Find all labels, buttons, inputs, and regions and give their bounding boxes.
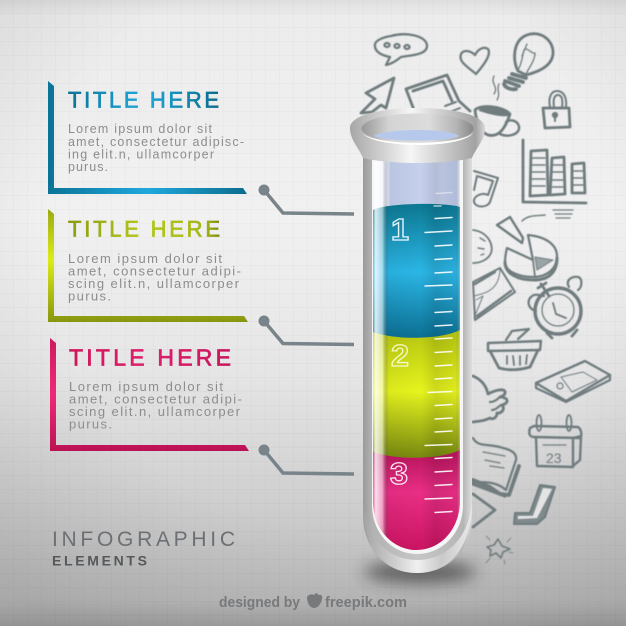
icon: calendar: 23 <box>546 450 562 466</box>
rim opening <box>362 114 474 144</box>
icon: cursor arrow <box>361 78 394 113</box>
icon: pie chart <box>497 215 557 280</box>
icon: light bulb <box>504 34 553 89</box>
text block: green description: scing elit.n, ullamcorper <box>68 276 240 291</box>
icon: calendar <box>529 415 581 467</box>
icon: text lines <box>553 210 573 218</box>
tube base highlight <box>363 500 472 573</box>
credit text: freepik: freepik.com <box>325 595 407 611</box>
glass interior <box>372 160 463 554</box>
yellow liquid <box>373 330 460 458</box>
icon: padlock <box>543 91 570 128</box>
panel: title three <box>50 338 249 451</box>
heading: blue title: TITLE HERE <box>68 88 219 112</box>
liquid surface seen through opening <box>374 130 459 140</box>
text block: blue description: purus. <box>68 160 108 174</box>
text block: pink description: Lorem ipsum dolor sit <box>69 379 223 394</box>
sketch icons <box>361 34 610 564</box>
icon: star <box>486 536 513 564</box>
credit text: designed by: designed by <box>219 595 300 611</box>
test tube <box>350 108 485 583</box>
pink liquid <box>373 450 460 555</box>
scale ticks <box>425 192 452 512</box>
bracket: green <box>48 209 248 322</box>
connector: title two to tube <box>258 316 354 344</box>
panel: title two <box>48 209 248 322</box>
icon: heart <box>460 48 489 74</box>
number 1: 1 <box>391 212 409 247</box>
heading: green title: TITLE HERE <box>68 216 220 242</box>
icon: freepik logo <box>307 593 322 608</box>
panel: title one <box>48 81 247 194</box>
icon: laptop <box>406 75 470 112</box>
text block: blue description: amet, consectetur adipisc- <box>68 135 244 149</box>
subheading: elements: ELEMENTS <box>52 552 147 568</box>
blue liquid <box>373 204 460 340</box>
icon: checkmark <box>514 485 555 524</box>
text block: pink description: amet, consectetur adipi- <box>69 392 242 406</box>
text block: blue description: ing elit.n, ullamcorper <box>68 148 214 162</box>
tube rim <box>350 108 485 163</box>
text block: blue description: Lorem ipsum dolor sit <box>68 122 213 136</box>
rim highlight <box>362 133 473 145</box>
icon: speech bubble <box>375 34 427 65</box>
icon: paper plane <box>473 494 495 527</box>
heading: pink title: TITLE HERE <box>69 344 231 370</box>
text block: pink description: scing elit.n, ullamcorper <box>69 404 241 419</box>
bracket: pink <box>50 338 249 451</box>
text block: green description: purus. <box>68 288 111 304</box>
icon: open book <box>473 438 519 496</box>
number 3: 3 <box>390 456 408 491</box>
text block: pink description: purus. <box>69 416 112 432</box>
number 2: 2 <box>391 338 409 373</box>
icon: tablet <box>536 361 610 402</box>
footer credit <box>219 593 407 611</box>
icon: envelope <box>473 268 515 320</box>
text block: green description: amet, consectetur adipi- <box>68 264 241 278</box>
empty glass <box>384 160 460 207</box>
icon: thumbs up <box>473 376 507 422</box>
glass sheen <box>373 150 460 555</box>
connector: title three to tube <box>258 444 354 474</box>
icon: basket <box>488 329 541 370</box>
icon: music note <box>474 171 498 206</box>
icon: bar chart <box>523 140 586 203</box>
icon: alarm clock <box>529 277 581 338</box>
heading: infographic: INFOGRAPHIC <box>52 528 235 551</box>
bracket: blue <box>48 81 247 194</box>
liquid column <box>373 150 460 555</box>
connector: title one to tube <box>258 184 354 214</box>
tube shadow <box>364 561 476 583</box>
icon: coffee cup <box>475 76 519 136</box>
tube wall <box>363 150 472 573</box>
text block: green description: Lorem ipsum dolor sit <box>68 251 222 266</box>
title: infographic elements <box>52 528 235 568</box>
icon: cookie <box>473 230 492 263</box>
